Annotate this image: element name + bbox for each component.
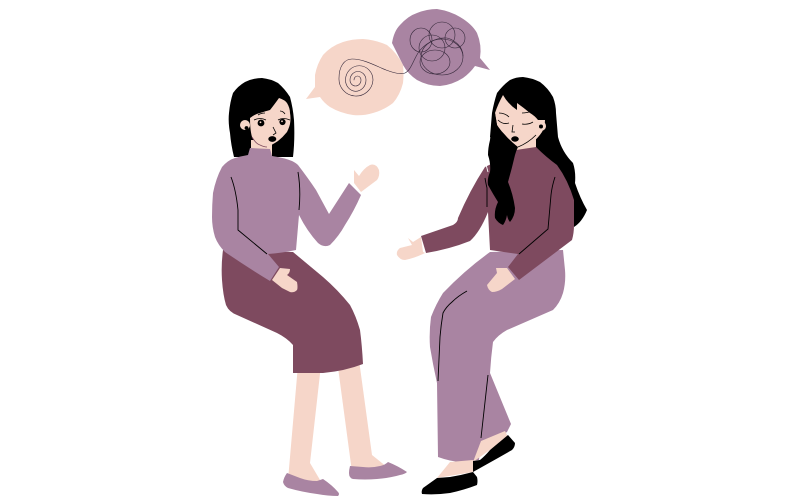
left shoe (283, 473, 339, 496)
earring (539, 124, 543, 128)
front hair lock (488, 113, 518, 225)
face features (498, 111, 536, 147)
woman on the left (212, 78, 407, 496)
pants fold lines (438, 291, 488, 438)
skirt (222, 250, 363, 373)
back shoe (473, 435, 515, 472)
face (495, 95, 545, 147)
resting hand (487, 268, 515, 292)
white hair strand (484, 140, 489, 172)
sweater fold lines (231, 172, 300, 254)
back hair (490, 77, 587, 227)
neck (515, 138, 536, 152)
thought line: spiral into tangle (339, 22, 465, 96)
right leg (337, 360, 387, 472)
right shoe (349, 462, 407, 480)
ear (240, 120, 250, 130)
pants (430, 250, 565, 462)
front shoe (422, 472, 478, 494)
earring (245, 126, 248, 130)
peach speech bubble (306, 39, 404, 115)
thin hair strand (485, 178, 487, 207)
speech bubbles (306, 9, 490, 115)
ear (536, 121, 546, 131)
sweater fold lines (519, 177, 555, 254)
sweater with raised arm (212, 148, 361, 281)
back foot (473, 431, 508, 462)
extended hand (397, 237, 425, 260)
resting hand (272, 268, 298, 292)
raised hand (354, 165, 379, 192)
sweater with extended arm (421, 147, 574, 280)
left leg (288, 365, 323, 485)
woman on the right (397, 77, 587, 494)
face features (252, 111, 290, 147)
front foot (437, 460, 473, 478)
purple speech bubble (392, 9, 490, 86)
hair (229, 78, 294, 157)
neck (251, 140, 272, 158)
face (250, 98, 290, 147)
